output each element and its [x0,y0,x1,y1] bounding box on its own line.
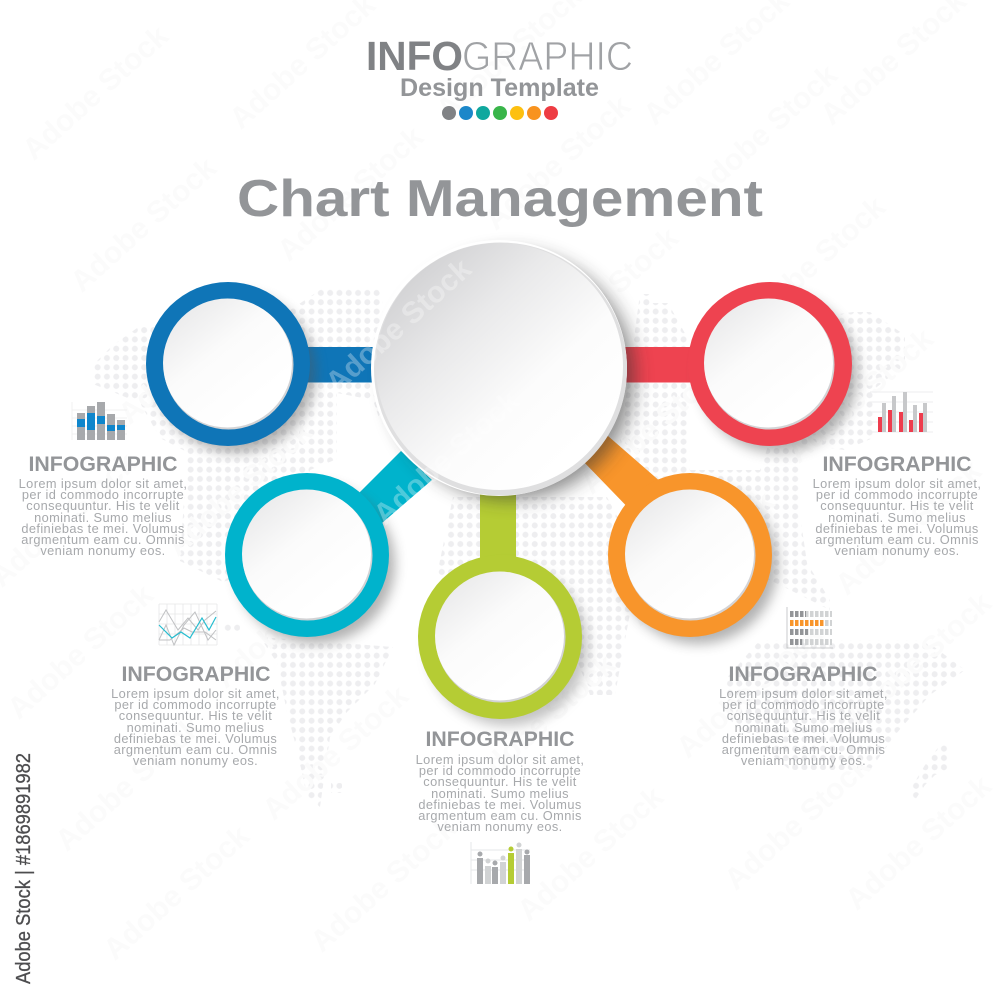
text block: blue: Lorem ipsum dolor sit amet, [19,476,187,491]
text block: green: argmentum eam cu. Omnis [418,808,582,823]
watermark pattern: Adobe Stock [685,58,844,206]
text block: green [416,727,584,834]
watermark pattern: Adobe Stock [718,749,877,897]
text block: blue: INFOGRAPHIC [28,452,178,476]
watermark pattern: Adobe Stock [1,578,160,726]
text block: blue: consequuntur. His te velit [26,498,180,513]
text block: green: nominati. Sumo melius [431,786,569,801]
watermark pattern: Adobe Stock [64,151,223,299]
text block: blue: argmentum eam cu. Omnis [21,532,185,547]
watermark pattern: Adobe Stock [781,322,940,470]
text block: orange [719,662,888,768]
text block: orange: definiebas te mei. Volumus [722,731,885,746]
watermark pattern: Adobe Stock [839,586,998,734]
watermark pattern: Adobe Stock [478,89,637,237]
text block: teal: definiebas te mei. Volumus [114,731,277,746]
text block: orange: Lorem ipsum dolor sit amet, [719,686,888,701]
text block: orange: argmentum eam cu. Omnis [722,742,885,757]
node: green ring [418,555,588,726]
watermark pattern: Adobe Stock [160,415,319,563]
central circle [319,240,635,532]
icon: blue stacked bars [72,402,127,440]
text block: green: consequuntur. His te velit [423,774,577,789]
text block: blue: per id commodo incorrupte [22,487,184,502]
logo heading [366,33,633,79]
icon: teal line chart [159,604,217,645]
watermark pattern: Adobe Stock [49,710,208,858]
connector: orange [580,436,670,520]
text block: teal: INFOGRAPHIC [121,662,271,686]
text block: teal: nominati. Sumo melius [127,720,264,735]
watermark pattern: Adobe Stock [112,283,271,431]
text block: green: definiebas te mei. Volumus [418,797,582,812]
connector: red [615,347,705,382]
watermark pattern: Adobe Stock [622,485,781,633]
text block: blue [19,452,187,558]
icon: orange pictogram chart [787,607,833,648]
watermark pattern: Adobe Stock [526,221,685,369]
text block: orange: consequuntur. His te velit [727,708,880,723]
subtitle: Design Template [400,74,599,102]
watermark pattern: Adobe Stock [463,648,622,796]
icon: red bar chart [870,392,933,432]
watermark pattern: Adobe Stock [511,780,670,928]
logo heading: INFO [366,33,463,79]
connector: green [480,485,516,570]
colour dots [442,106,558,120]
text block: teal: argmentum eam cu. Omnis [114,742,277,757]
watermark pattern: Adobe Stock [304,811,463,959]
node: teal ring [225,473,395,644]
watermark pattern: Adobe Stock [670,617,829,765]
text block: teal: per id commodo incorrupte [114,697,277,712]
text block: orange: per id commodo incorrupte [722,697,885,712]
watermark pattern: Adobe Stock [208,547,367,695]
text block: red: per id commodo incorrupte [816,487,978,502]
text block: red: nominati. Sumo melius [828,510,966,525]
text block: teal [111,662,280,768]
text block: teal: Lorem ipsum dolor sit amet, [111,686,280,701]
node: orange ring [608,473,778,644]
connector: blue [296,347,386,382]
central circle: Adobe Stock [319,252,478,400]
text block: blue: veniam nonumy eos. [40,543,166,558]
text block: teal: veniam nonumy eos. [133,753,258,768]
connector: teal [345,451,432,535]
watermark pattern: Adobe Stock [733,190,892,338]
text block: red: veniam nonumy eos. [834,543,960,558]
text block: green: Lorem ipsum dolor sit amet, [416,752,584,767]
watermark pattern: Adobe Stock [839,769,998,917]
text block: red: argmentum eam cu. Omnis [815,532,979,547]
central circle: Adobe Stock [367,384,526,532]
icon: green lollipop bars [471,842,530,884]
node: blue ring [146,282,316,453]
watermark pattern: Adobe Stock [256,679,415,827]
text block: green: veniam nonumy eos. [437,819,563,834]
text block: blue: definiebas te mei. Volumus [21,521,185,536]
text block: red: consequuntur. His te velit [820,498,974,513]
text block: orange: INFOGRAPHIC [728,662,878,686]
dotted world map [93,288,965,807]
watermark pattern: Adobe Stock [16,19,175,167]
text block: red: Lorem ipsum dolor sit amet, [813,476,981,491]
main title: Chart Management [237,170,763,228]
logo heading: GRAPHIC [462,33,633,79]
text block: green: per id commodo incorrupte [419,763,581,778]
text block: red [813,452,981,558]
watermark pattern: Adobe Stock [271,120,430,268]
text block: teal: consequuntur. His te velit [119,708,272,723]
watermark pattern: Adobe Stock [97,819,256,967]
watermark pattern: Adobe Stock [574,353,733,501]
node: red ring [688,282,858,453]
text block: green: INFOGRAPHIC [425,727,575,751]
text block: orange: nominati. Sumo melius [735,720,872,735]
text block: orange: veniam nonumy eos. [741,753,866,768]
text block: red: INFOGRAPHIC [822,452,972,476]
text block: red: definiebas te mei. Volumus [815,521,979,536]
text block: blue: nominati. Sumo melius [34,510,172,525]
watermark pattern: Adobe Stock [829,454,988,602]
stock id label: Adobe Stock | #1869891982 [13,753,35,984]
